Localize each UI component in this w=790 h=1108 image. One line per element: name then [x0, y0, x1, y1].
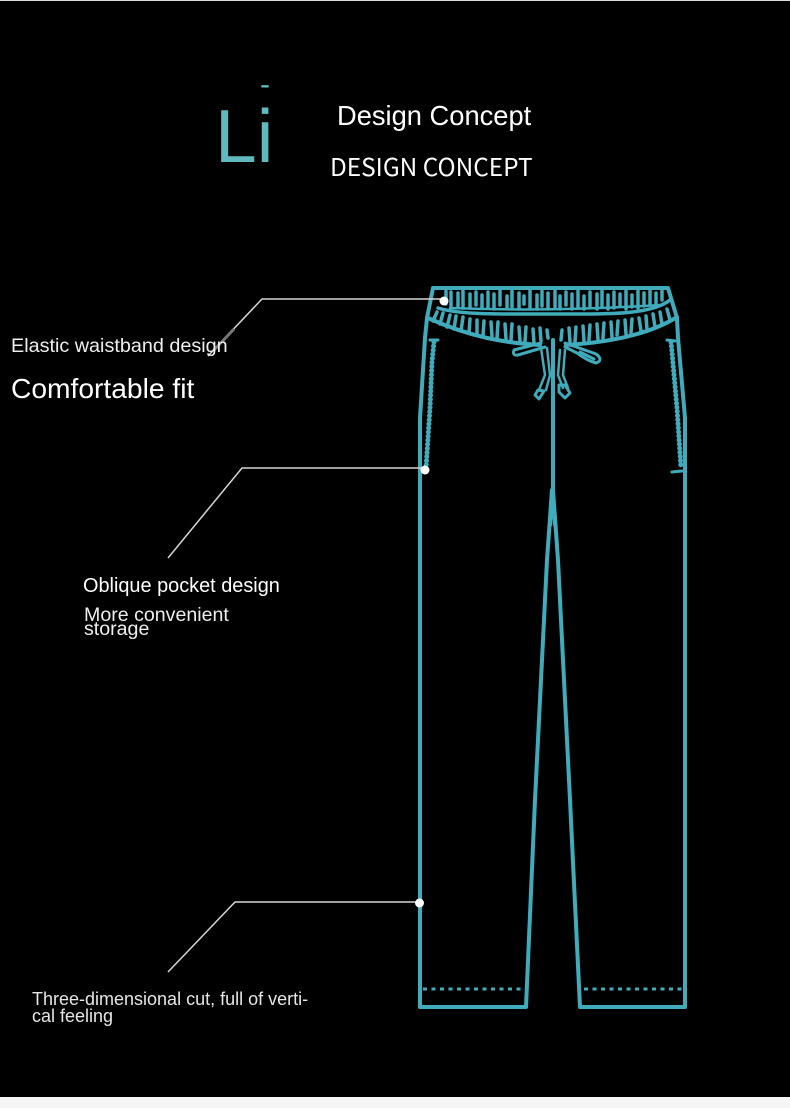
callout text: Oblique pocket design: Oblique pocket design: [83, 575, 280, 597]
brand mark accent: -: [260, 68, 270, 101]
subtitle: DESIGN CONCEPT: DESIGN CONCEPT: [330, 149, 533, 184]
bottom light strip: [0, 1097, 790, 1108]
outer left side seam: [420, 318, 427, 1007]
callout text: More convenient storage: storage: [84, 618, 149, 640]
waistband ruching: [446, 291, 662, 309]
brand mark: Li: Li: [215, 94, 273, 178]
waistband outline: [427, 288, 677, 318]
left pocket: [430, 338, 438, 342]
right pocket: [667, 340, 675, 341]
center seam and inseams: [551, 340, 555, 490]
callout text: More convenient storage: More convenient: [84, 604, 229, 626]
callout text: Elastic waistband design: Elastic waistband design: [11, 335, 228, 357]
callout text: Three-dimensional cut: cal feeling: [32, 1006, 113, 1026]
title: Design Concept: Design Concept: [337, 100, 531, 130]
callout text: More convenient storage: [84, 604, 229, 640]
callout text: Comfortable fit: Comfortable fit: [11, 372, 194, 404]
drawstring: [514, 343, 545, 355]
hems: [420, 1005, 525, 1009]
outer right side seam: [677, 318, 685, 1007]
top edge line: [0, 0, 790, 1]
callout text: Three-dimensional cut: [32, 989, 308, 1026]
callout text: Three-dimensional cut: Three-dimensional cut, full of verti-: [32, 989, 308, 1009]
